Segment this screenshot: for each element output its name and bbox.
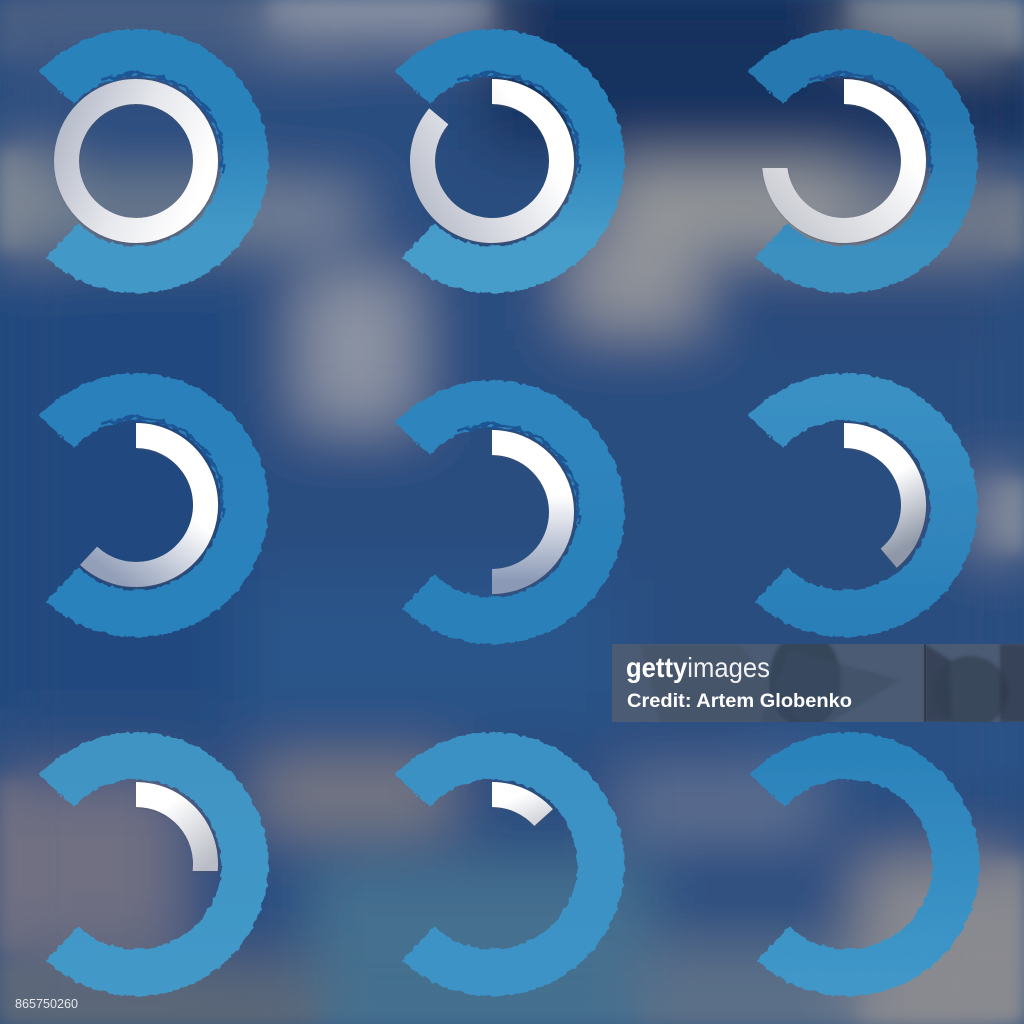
panel: progress ring 180 degrees [412, 404, 601, 621]
jagged inner edge [101, 74, 223, 173]
blue arc [412, 53, 601, 270]
panel: progress ring 223 degrees [56, 397, 245, 614]
blue arc [412, 404, 601, 621]
watermark credit text: Credit: Artem Globenko [627, 691, 852, 712]
watermark logo text: gettyimages [626, 652, 770, 683]
jagged inner edge [457, 74, 579, 173]
panel: progress ring 265 degrees [762, 53, 954, 270]
white full ring [66, 92, 206, 230]
panel: progress ring 140 degrees [765, 397, 954, 614]
white arc segment [762, 79, 926, 243]
blue arc [56, 397, 245, 614]
white arc segment [844, 436, 913, 558]
panel: empty progress ring [767, 756, 956, 973]
jagged inner edge [809, 74, 931, 173]
white arc segment [492, 794, 544, 818]
watermark banner [612, 644, 1024, 722]
white arc segment [423, 92, 562, 231]
image id number: 865750260 [15, 997, 78, 1011]
panel: progress ring 95 degrees [56, 756, 245, 973]
white arc segment [136, 782, 218, 871]
blue arc [765, 397, 954, 614]
white arc segment [89, 436, 206, 574]
jagged inner edge [457, 425, 579, 524]
jagged inner edge [101, 418, 223, 517]
panel: progress ring 310 degrees [412, 53, 601, 270]
blue arc [765, 53, 954, 270]
white arc segment [492, 442, 562, 582]
blue arc [56, 756, 245, 973]
blue arc [767, 756, 956, 973]
panel: progress ring 48 degrees [412, 756, 601, 973]
panel: progress ring full [56, 53, 245, 270]
blue arc [56, 53, 245, 270]
blue arc [412, 756, 601, 973]
